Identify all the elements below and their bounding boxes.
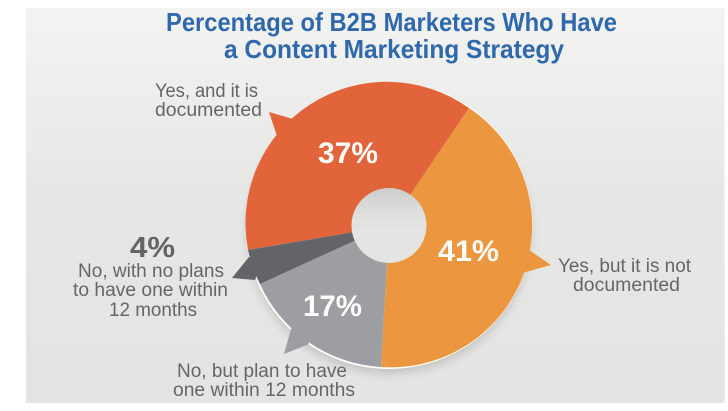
slice: no plans 4% [232,225,389,284]
label: yes, and it is documented: Yes, and it is [155,81,258,102]
label: yes, and it is documented: documented [155,100,262,121]
label: yes, but not documented [558,256,692,296]
title: a Content Marketing Strategy [224,34,565,64]
label: 4% no plans: No, with no plans [78,261,224,282]
donut hole [352,188,426,263]
label: yes, but not documented: Yes, but it is not [558,256,692,277]
label: 4% no plans [73,232,228,321]
label: no, but plan: one within 12 months [173,380,355,401]
value: 41%: 41% [438,235,499,268]
label: yes, and it is documented [155,81,262,121]
value: 17%: 17% [303,290,362,323]
label: no, but plan [173,361,355,401]
label: yes, but not documented: documented [573,275,680,296]
slice: no, plan within 12 months 17% [260,225,389,367]
donut chart [232,82,551,373]
slice: yes, not documented 41% [381,108,551,367]
slice: yes, documented 37% [245,82,469,250]
label: 4% no plans: to have one within [73,280,228,301]
label: 4% no plans: 12 months [109,300,197,321]
label: 4% no plans: 4% [130,232,175,264]
value: 37%: 37% [318,137,378,170]
label: no, but plan: No, but plan to have [177,361,347,382]
title: Percentage of B2B Marketers Who Have [166,7,617,37]
title [166,7,617,64]
